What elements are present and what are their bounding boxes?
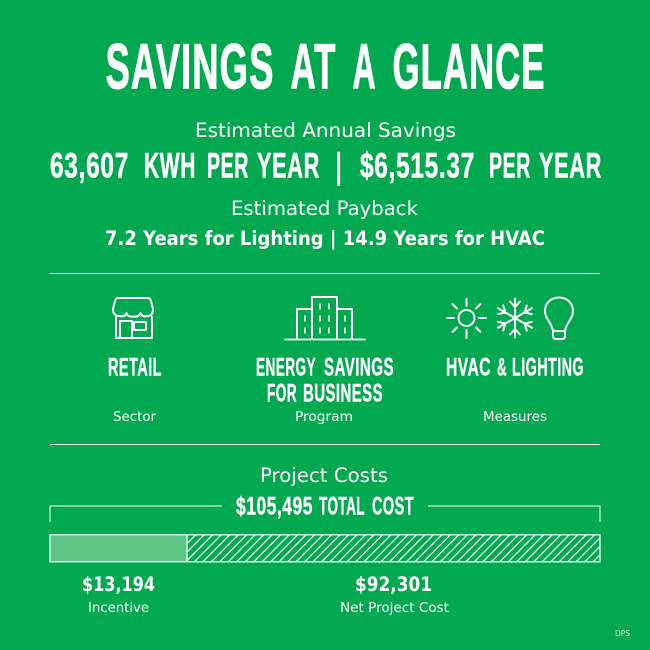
value: incentive: $13,194 [82, 573, 155, 596]
label: energy savings for business: SAVINGS [324, 354, 394, 382]
annual savings figures: $6,515.37 [360, 146, 475, 186]
annual savings figures: | [336, 146, 342, 186]
title: A [352, 30, 376, 102]
bar segment: incentive [50, 535, 187, 562]
heading: project costs: Project Costs [260, 464, 388, 487]
label: energy savings for business [256, 354, 394, 408]
heading: estimated payback: Estimated Payback [231, 197, 419, 220]
label: hvac and lighting: HVAC [446, 354, 491, 382]
icon: retail storefront [113, 298, 153, 338]
annual savings figures [50, 146, 602, 186]
label: retail: RETAIL [108, 354, 162, 382]
label: hvac and lighting [446, 354, 584, 382]
total cost: COST [372, 492, 414, 520]
annual savings figures: PER [489, 146, 531, 186]
title: AT [290, 30, 336, 102]
icon: light bulb [545, 298, 573, 339]
total cost bracket [50, 506, 600, 522]
caption: net project cost: Net Project Cost [340, 600, 449, 616]
payback figures: 7.2 Years for Lighting | 14.9 Years for HVAC [105, 227, 545, 250]
label: energy savings for business: BUSINESS [303, 380, 383, 408]
annual savings figures: YEAR [257, 146, 320, 186]
annual savings figures: 63,607 [50, 146, 129, 186]
annual savings figures: PER [207, 146, 249, 186]
heading: estimated annual savings: Estimated Annual Savings [195, 119, 456, 142]
caption: program: Program [295, 410, 353, 425]
label: hvac and lighting: LIGHTING [512, 354, 584, 382]
credit: DPS [615, 629, 630, 638]
annual savings figures: KWH [144, 146, 196, 186]
bar segment: net project cost [187, 535, 600, 562]
icon: office buildings [285, 297, 365, 340]
stacked cost bar [50, 535, 600, 562]
annual savings figures: YEAR [539, 146, 602, 186]
label: energy savings for business: ENERGY [256, 354, 316, 382]
caption: sector: Sector [113, 410, 157, 425]
value: net project cost: $92,301 [355, 573, 432, 596]
label: energy savings for business: FOR [267, 380, 297, 408]
total cost [236, 492, 414, 520]
title: SAVINGS [106, 30, 274, 102]
caption: incentive: Incentive [88, 600, 149, 616]
icon: sun [447, 299, 486, 338]
title [106, 30, 546, 102]
caption: measures: Measures [483, 410, 547, 425]
label: hvac and lighting: & [497, 354, 507, 382]
total cost: TOTAL [319, 492, 365, 520]
icon: snowflake [496, 298, 534, 338]
total cost: $105,495 [236, 492, 313, 520]
